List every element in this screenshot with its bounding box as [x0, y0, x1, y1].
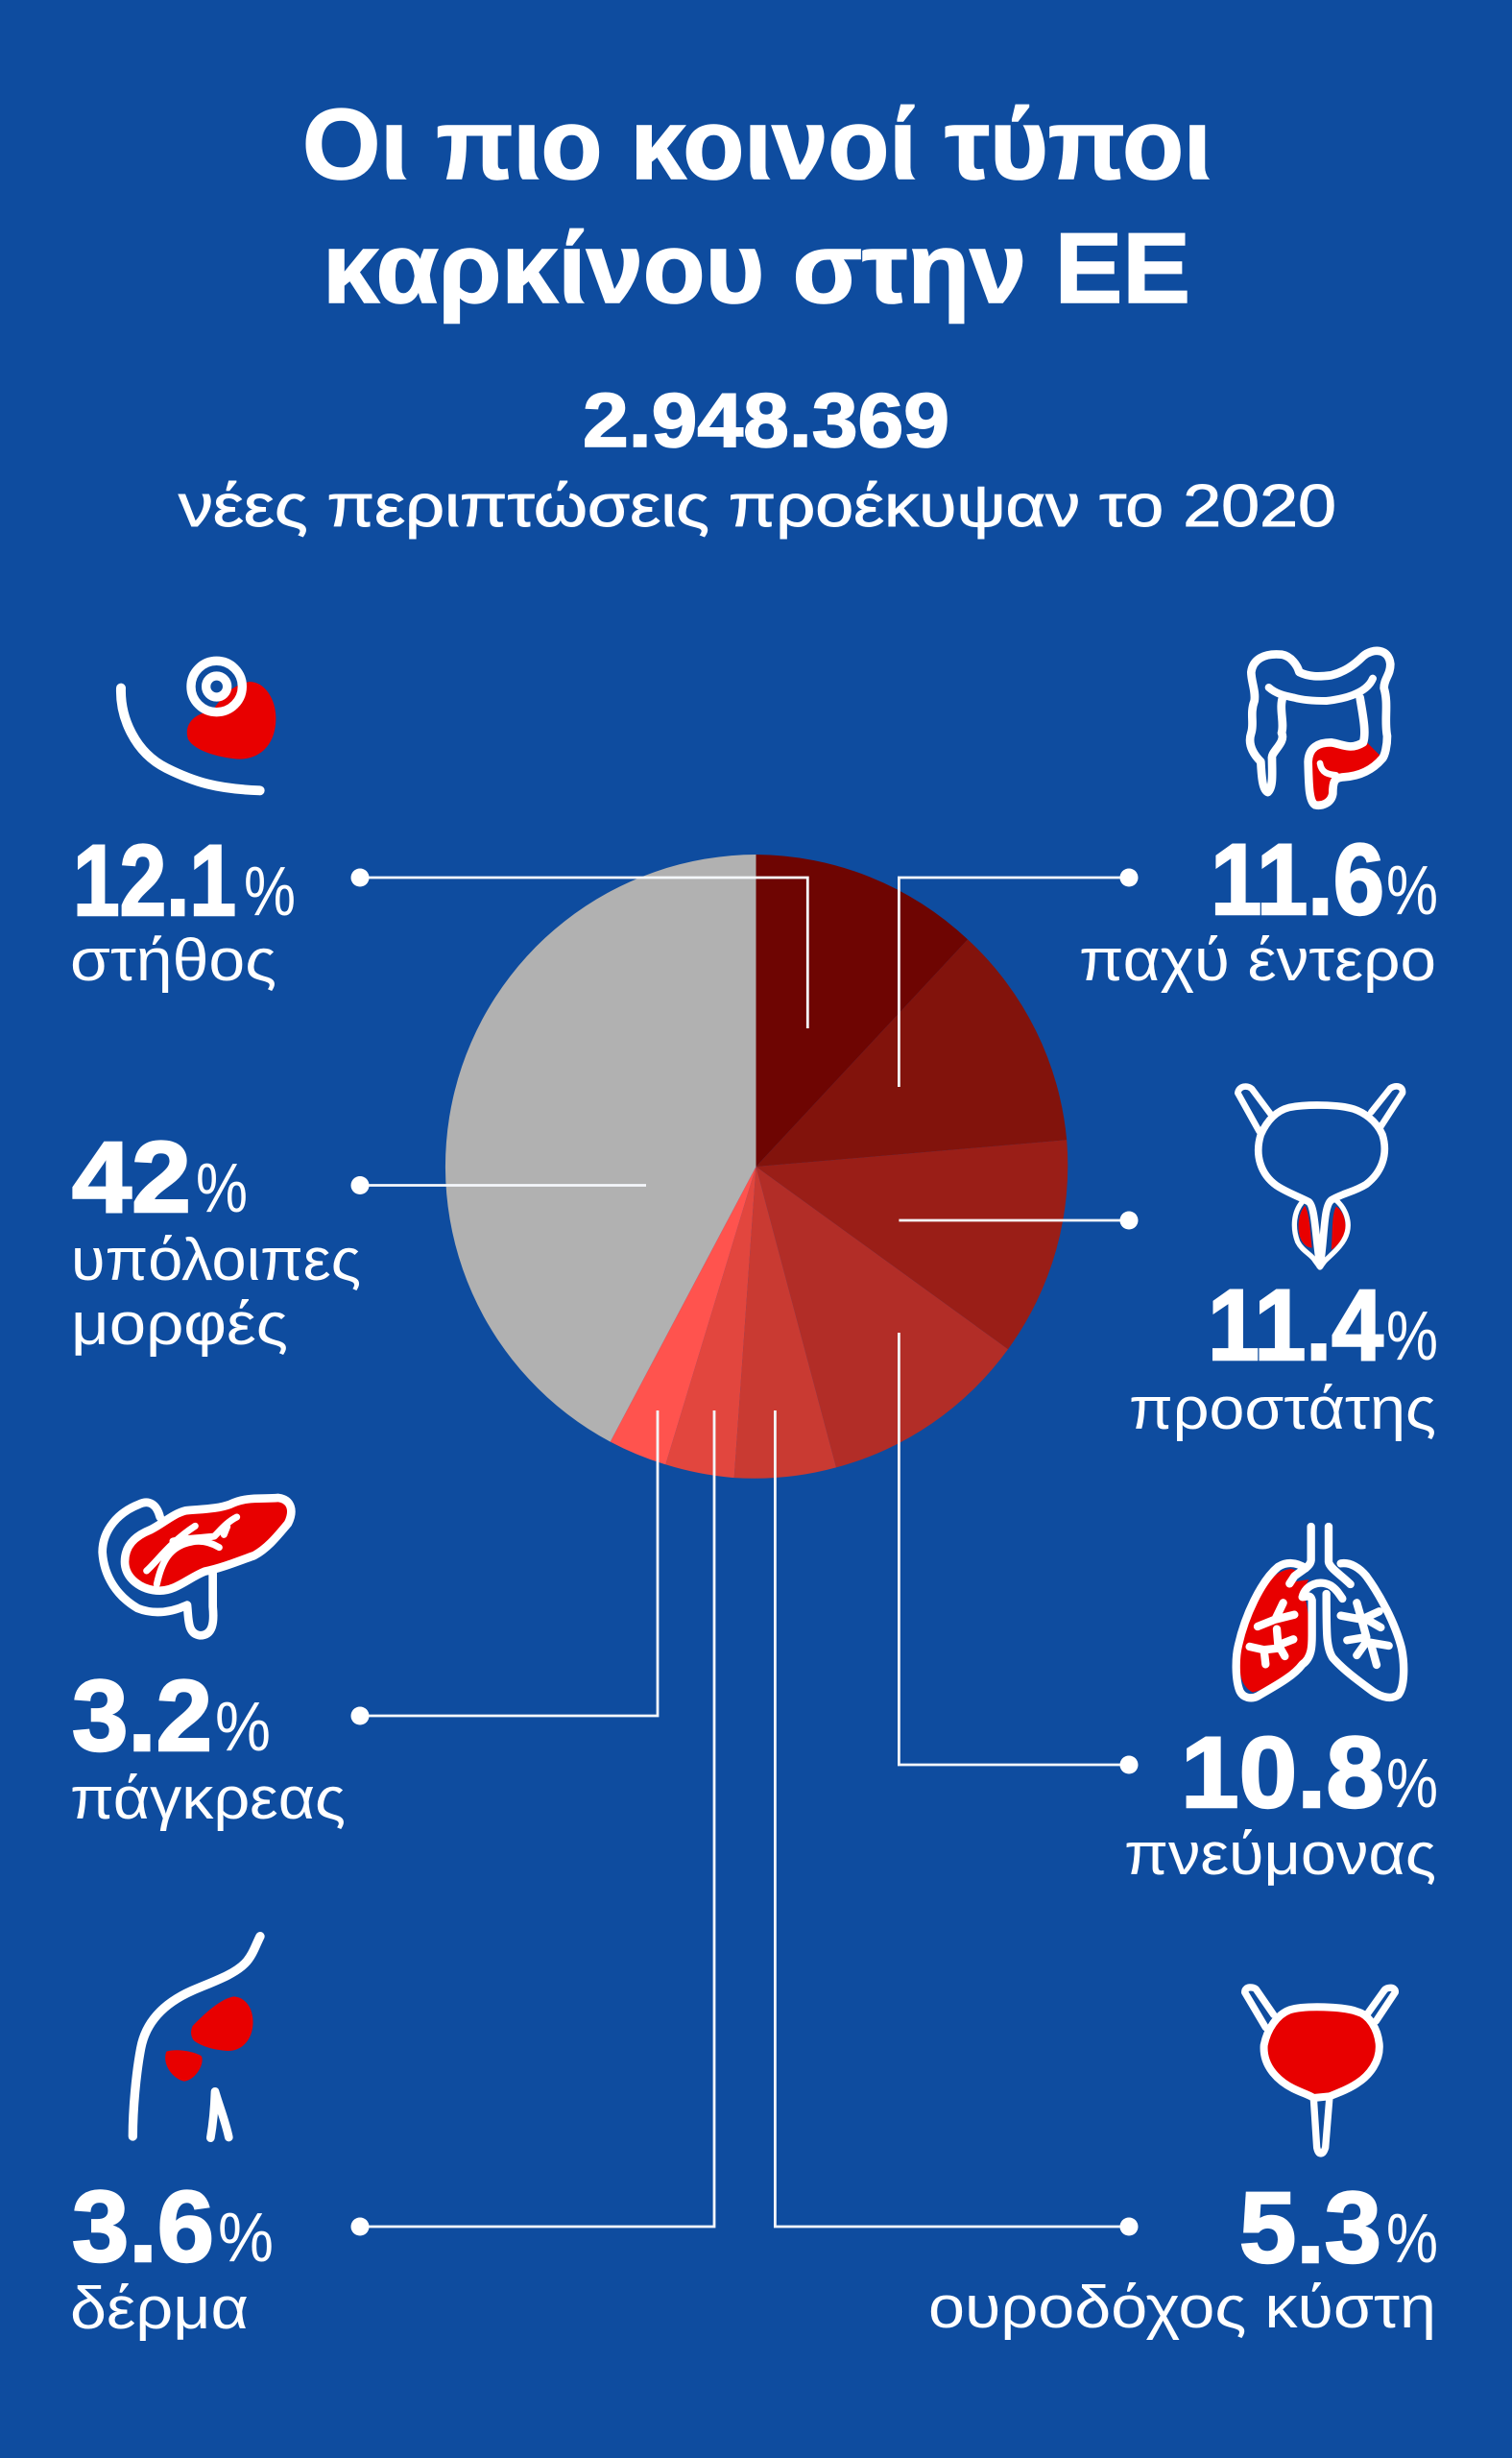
value: 12.1: [73, 825, 236, 937]
panel: colon: [899, 651, 1438, 1087]
icon: breast: [121, 661, 276, 790]
leader line: [899, 1212, 1139, 1229]
value: %: [1386, 1746, 1438, 1822]
panel: skin: [70, 1410, 714, 2342]
label: [71, 1227, 361, 1358]
icon: skin: [132, 1937, 260, 2138]
value: %: [1386, 1298, 1438, 1375]
title: καρκίνου στην ΕΕ: [323, 213, 1190, 325]
icon: lungs: [1236, 1527, 1404, 1698]
value: %: [215, 1689, 271, 1766]
icon: colon: [1250, 651, 1390, 806]
value: 3.2: [72, 1660, 212, 1772]
value: %: [196, 1150, 248, 1227]
leader line: [351, 1410, 714, 2235]
label: πάγκρεας: [70, 1766, 346, 1832]
value: 42: [72, 1121, 191, 1234]
value: 10.8: [1181, 1717, 1384, 1829]
value: 11.4: [1208, 1269, 1383, 1382]
label: προστάτης: [1129, 1376, 1436, 1442]
icon: pancreas: [103, 1498, 291, 1635]
panel: lung: [899, 1333, 1438, 1888]
title: Οι πιο κοινοί τύποι: [302, 89, 1212, 201]
value: %: [1386, 853, 1438, 929]
label: δέρμα: [70, 2276, 249, 2342]
panel: pancreas: [70, 1410, 658, 1832]
value: %: [218, 2200, 274, 2277]
leader line: [351, 1176, 646, 1194]
icon: prostate: [1237, 1086, 1403, 1267]
title: [302, 89, 1212, 325]
pie chart: [445, 855, 1068, 1479]
leader line: [351, 1410, 658, 1724]
leader line: [775, 1410, 1139, 2235]
value: 11.6: [1211, 824, 1384, 936]
value: 3.6: [72, 2171, 214, 2283]
value: [72, 1121, 248, 1234]
value: %: [1386, 2201, 1438, 2277]
label: μορφές: [71, 1291, 288, 1358]
panel: prostate: [899, 1086, 1438, 1442]
panel: other forms: [71, 1121, 646, 1358]
panel: bladder: [775, 1410, 1438, 2341]
label: πνεύμονας: [1124, 1821, 1436, 1888]
panel: breast: [70, 661, 807, 1028]
leader line: [351, 868, 807, 1028]
icon: bladder: [1245, 1988, 1395, 2154]
value: [72, 2171, 274, 2283]
subtitle: νέες περιπτώσεις προέκυψαν το 2020: [179, 473, 1336, 540]
leader line: [899, 868, 1139, 1087]
value: %: [244, 854, 296, 930]
label: παχύ έντερο: [1079, 928, 1436, 994]
label: υπόλοιπες: [71, 1227, 361, 1293]
total new cases: 2.948.369: [583, 377, 949, 463]
label: ουροδόχος κύστη: [928, 2275, 1436, 2341]
leader line: [899, 1333, 1139, 1774]
value: 5.3: [1239, 2172, 1381, 2284]
label: στήθος: [70, 928, 276, 994]
